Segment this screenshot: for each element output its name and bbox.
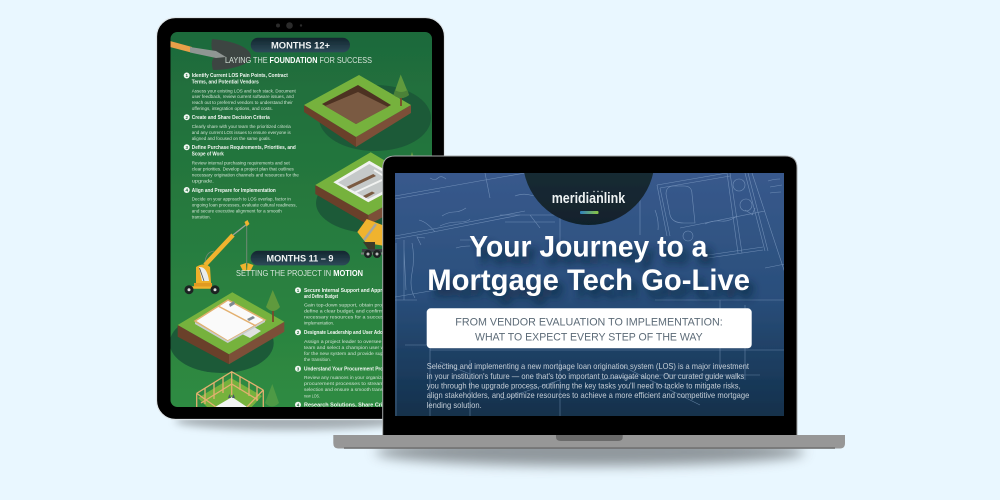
step 4: 4 <box>185 188 188 193</box>
blueprint line art <box>395 173 785 416</box>
step 4 <box>295 402 382 407</box>
step 1 <box>184 72 297 111</box>
step 4: 4 <box>297 402 300 407</box>
title: Mortgage Tech Go-Live <box>427 264 750 297</box>
step 2: the transition. <box>304 357 331 362</box>
intro paragraph: you through the upgrade process, outlining the key tasks you'll need to tackle to mitigate risks, <box>427 381 741 391</box>
step 4 <box>184 187 297 220</box>
step 3: new LOS. <box>304 394 320 398</box>
subtitle box: FROM VENDOR EVALUATION TO IMPLEMENTATION: <box>455 317 723 329</box>
step 1: Secure Internal Support and Approval <box>304 288 393 294</box>
step 1: define a clear budget, and confirm the <box>304 308 393 314</box>
step 1: 1 <box>185 73 188 78</box>
list: months 12+ steps <box>184 72 299 220</box>
step 3: Understand Your Procurement Process <box>304 366 394 372</box>
illustration: cement mixer <box>357 219 382 258</box>
step 1: reach out to preferred vendors to understand their <box>192 100 293 105</box>
heading: months 12+: MONTHS 12+ <box>271 40 330 50</box>
step 3: 3 <box>185 145 188 150</box>
step 1: user feedback, review current software issues, and <box>192 94 294 99</box>
heading: months 11-9 <box>251 251 350 265</box>
step 1: and Define Budget <box>304 294 338 300</box>
step 2: Clearly share with your team the prioritized criteria <box>192 124 291 129</box>
laptop lid <box>383 156 797 436</box>
step 3: upgrade. <box>192 178 214 183</box>
logo dome <box>524 173 654 225</box>
step 2 <box>295 329 382 361</box>
intro paragraph: in your institution's future — one that's too important to navigate alone. Our curated guide walks <box>427 371 744 381</box>
step 1 <box>295 287 393 326</box>
step 1: 1 <box>297 288 300 293</box>
step 1: Identify Current LOS Pain Points, Contract <box>192 73 288 79</box>
logo <box>552 191 626 214</box>
step 1: Gain top-down support, obtain project <box>304 302 391 308</box>
title shadow <box>433 238 755 305</box>
step 4: Decide on your approach to LOS overlap, factor in <box>192 196 291 201</box>
step 1: necessary resources for a successful <box>304 314 392 320</box>
tablet frame <box>156 18 444 420</box>
step 3: selection and ensure a smooth transition <box>304 387 393 392</box>
step 2: Create and Share Decision Criteria <box>192 115 270 121</box>
step 2: and any current LOS issues to ensure everyone is <box>192 130 291 135</box>
step 3: Scope of Work <box>192 152 224 158</box>
laptop <box>333 156 845 449</box>
mockup scene <box>156 17 845 474</box>
step 4: and secure executive alignment for a smooth <box>192 209 282 214</box>
step 3: 3 <box>297 366 300 371</box>
step 2: aligned and focused on the same goals. <box>192 136 271 141</box>
logo: meridianlink <box>552 191 626 207</box>
laptop base <box>333 435 845 449</box>
tablet screen <box>170 32 432 412</box>
step 4: ongoing loan processes, evaluate cultural readiness, <box>192 202 297 207</box>
icon: shovel <box>170 39 251 70</box>
step 2: 2 <box>297 330 300 335</box>
step 1: offerings, integration options, and costs. <box>192 106 273 111</box>
laptop notch <box>556 435 623 441</box>
step 3: procurement processes to streamline <box>304 381 393 386</box>
intro paragraph: align stakeholders, and optimize resources to achieve a more efficient and competitive mortgage <box>427 390 750 400</box>
title <box>429 236 749 296</box>
illustration: wood frame lot <box>197 372 279 412</box>
subheading: setting the project in motion: SETTING THE PROJECT IN MOTION <box>236 269 363 278</box>
step 1: Terms, and Potential Vendors <box>192 80 259 86</box>
step 3 <box>184 144 299 183</box>
step 3: necessary origination channels and resources for the <box>192 172 299 177</box>
illustration: foundation lot <box>315 152 414 232</box>
step 1: Assess your existing LOS and tech stack. Document <box>192 89 297 94</box>
step 3 <box>295 366 382 398</box>
step 3: Define Purchase Requirements, Priorities, and <box>192 145 296 151</box>
tablet <box>156 18 444 420</box>
step 4: Align and Prepare for Implementation <box>192 188 276 194</box>
step 2: team and select a champion user who <box>304 345 391 350</box>
step 2: Designate Leadership and User Adoption <box>304 330 394 336</box>
tablet camera <box>276 22 302 29</box>
heading: months 11-9: MONTHS 11 – 9 <box>266 254 334 264</box>
subheading: laying the foundation: LAYING THE FOUNDATION FOR SUCCESS <box>225 56 372 65</box>
intro paragraph: Selecting and implementing a new mortgage loan origination system (LOS) is a major investment <box>427 361 750 371</box>
laptop drop shadow <box>375 438 805 466</box>
subtitle box <box>427 308 752 348</box>
step 2: Assign a project leader to oversee the <box>304 339 391 344</box>
illustration: framed slab lot <box>170 290 284 373</box>
tablet drop shadow <box>175 412 405 430</box>
title: Your Journey to a <box>469 231 708 264</box>
subtitle box: WHAT TO EXPECT EVERY STEP OF THE WAY <box>475 331 703 343</box>
intro paragraph: lending solution. <box>427 400 482 410</box>
illustration: excavated lot <box>304 74 431 151</box>
step 2 <box>184 114 291 141</box>
step 3: clear priorities. Develop a project plan that outlines <box>192 166 294 171</box>
step 3: Review any nuances in your organization <box>304 375 393 380</box>
title shadow: Your Journey to a <box>475 238 713 271</box>
list: months 11-9 steps <box>295 287 382 407</box>
heading: months 12+ <box>251 38 350 52</box>
step 2: for the new system and provide support <box>304 351 393 356</box>
step 2: 2 <box>185 115 188 120</box>
intro paragraph <box>427 361 750 410</box>
step 3: Review internal purchasing requirements and set <box>192 160 291 165</box>
step 1: implementation. <box>304 320 334 326</box>
illustration: crane <box>184 220 254 294</box>
step 4: Research Solutions, Share Criteria <box>304 402 394 408</box>
title shadow: Mortgage Tech Go-Live <box>433 272 755 305</box>
step 4: transition. <box>192 215 211 220</box>
laptop screen <box>395 173 784 416</box>
